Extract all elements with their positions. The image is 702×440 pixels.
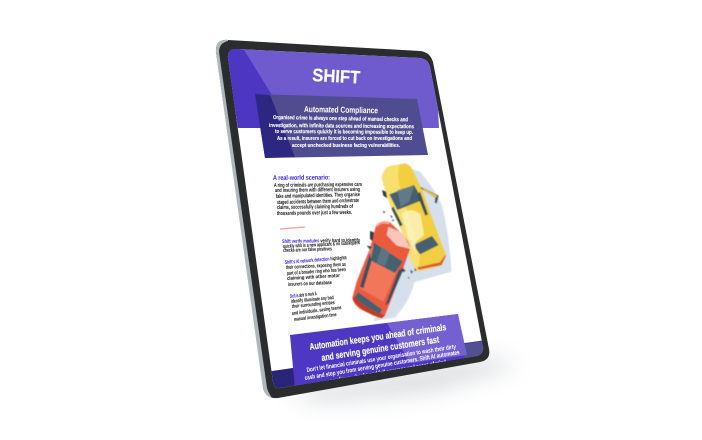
yellow car xyxy=(382,163,446,271)
note 2 xyxy=(285,255,347,288)
note 2: part of a broader ring who has been xyxy=(287,267,346,277)
logo: SHIFT: SHIFT xyxy=(312,65,361,88)
call to action text xyxy=(304,344,460,380)
red car xyxy=(352,221,411,318)
note 3: Shift is able to mark & xyxy=(290,291,317,300)
intro panel xyxy=(255,94,428,158)
note 2: insurers on our database xyxy=(288,280,332,288)
note 2: claiming with other motor xyxy=(287,273,340,282)
call to action text: compliance checks and full coverage and peace of mind xyxy=(327,359,447,385)
detection notes xyxy=(282,238,360,323)
car shadow xyxy=(373,169,452,321)
panel body text: As a result, insurers are forced to cut back on investigations and xyxy=(277,136,412,142)
note 1: Shift verify modules verify hard to identify xyxy=(282,238,360,245)
note 3: manual investigation time xyxy=(294,312,337,323)
scenario text: thousands pounds over just a few weeks. xyxy=(277,210,352,217)
note 3: and individuals, saving teams xyxy=(292,305,342,317)
call to action heading: Automation keeps you ahead of criminals xyxy=(309,322,447,353)
tablet body xyxy=(216,40,489,398)
scenario heading: A real-world scenario: xyxy=(273,175,330,182)
call to action text: Don't let financial criminals use your organisation to wash their dirty xyxy=(306,343,457,374)
panel body text: Organised crime is always one step ahead of manual checks and xyxy=(273,115,409,123)
panel body text: to serve customers quickly it is becoming impossible to keep up. xyxy=(275,129,413,136)
scenario text xyxy=(274,182,362,217)
call to action heading: and serving genuine customers fast xyxy=(321,334,441,364)
call to action heading xyxy=(310,324,446,361)
scenario text: A ring of criminals are purchasing expensive cars xyxy=(274,182,362,189)
note 2: Shift's AI network detection highlights xyxy=(285,255,347,266)
tablet screen xyxy=(228,49,484,388)
note 1 xyxy=(282,238,360,252)
call to action text: cash and stop you from serving genuine customers. Shift AI automates xyxy=(304,349,461,382)
tablet shadow xyxy=(285,358,520,402)
bottom band xyxy=(272,340,484,388)
header band xyxy=(225,45,439,128)
note 3 xyxy=(290,291,342,323)
divider accent xyxy=(280,227,305,229)
panel body text xyxy=(269,115,414,149)
debris xyxy=(383,211,417,279)
note 3: their surrounding entities xyxy=(292,300,335,310)
scenario text: claims, successfully claiming hundreds of xyxy=(277,204,353,211)
panel body text: accept unchecked business facing vulnerabilities. xyxy=(292,143,400,149)
illustration: car crash xyxy=(352,163,452,321)
call to action panel xyxy=(290,314,467,386)
panel heading: Automated Compliance xyxy=(304,104,378,115)
note 1: checks are our false positives xyxy=(283,246,332,254)
note 2: their connections, exposing them as xyxy=(286,262,346,271)
scenario text: staged accidents between them and orchestrate xyxy=(277,198,359,206)
panel body text: investigation, with infinite data sources and increasing expectations xyxy=(269,123,414,130)
note 1: quickly who is a new applicant & no subsequent xyxy=(283,240,360,250)
scenario text: fake and manipulated identities. They organise xyxy=(276,192,360,200)
scenario text: and insuring them with different insurers using xyxy=(275,187,360,194)
note 3: identify illuminate any bad xyxy=(291,295,334,305)
infographic: tablet mockup xyxy=(216,40,508,409)
